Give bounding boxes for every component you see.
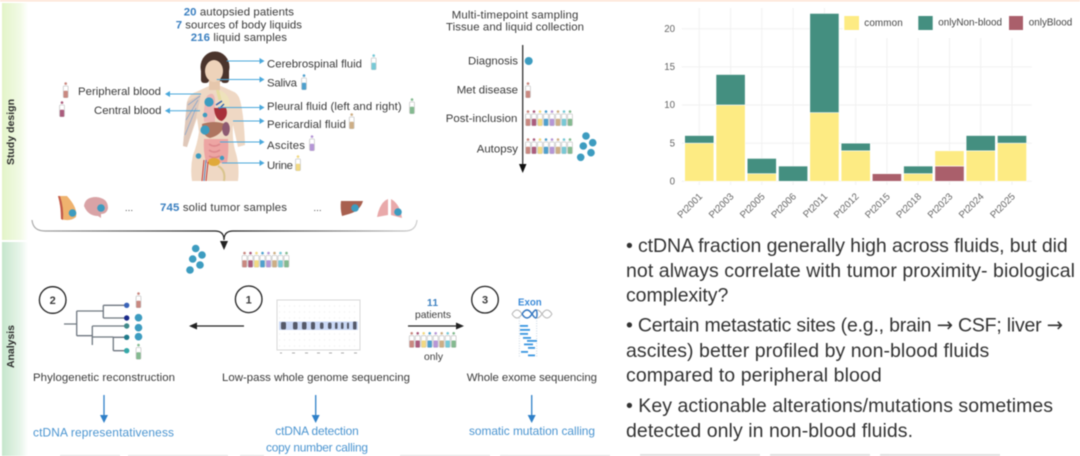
bullet: metastatic sites: [626, 314, 1063, 387]
bullet: actionable alterations: [626, 395, 1053, 442]
outcome label: ctDNA representativeness: [33, 426, 174, 440]
x axis labels: Pt2025: [988, 191, 1018, 221]
step number 2: 2: [50, 295, 56, 307]
bullet: ctDNA fraction: not always correlate with tumor proximity- biological: [626, 260, 1075, 282]
11 patients subset arrow: [408, 298, 464, 363]
bullet: actionable alterations: detected only in non-blood fluids.: [626, 420, 913, 442]
arrow: timeline axis: [519, 45, 526, 173]
outcome label: somatic mutation calling: [469, 424, 595, 438]
step label: Low-pass whole genome sequencing: [222, 372, 410, 384]
step 3: whole exome sequencing: [467, 286, 597, 438]
x axis labels: Pt2023: [926, 191, 955, 221]
timeline title: [446, 9, 584, 34]
phylogenetic tree: [64, 292, 142, 359]
icon: autopsy tubes: [526, 138, 572, 154]
step number 3: 3: [482, 295, 488, 307]
bullet: ctDNA fraction: [626, 235, 1075, 306]
timepoint labels: Diagnosis: [468, 55, 518, 67]
x axis labels: Pt2003: [707, 191, 736, 221]
panel: study design sidebar: [2, 3, 28, 240]
icon: brain: [84, 197, 108, 218]
legend: [844, 16, 1072, 30]
panel: analysis sidebar: [2, 242, 28, 456]
cohort summary text: 7 sources of body liquids: [176, 19, 302, 31]
y axis labels: 10: [664, 100, 676, 111]
fluid source labels: Ascites: [267, 140, 305, 152]
icon: lungs: [377, 199, 402, 218]
x axis labels: Pt2015: [863, 191, 893, 221]
clipped text remnants at bottom edge: [60, 454, 1000, 456]
step number 2: [39, 287, 66, 313]
arrow: step 1 to step 2: [189, 322, 244, 330]
11 patients subset arrow: patients: [415, 310, 451, 321]
fluid source labels: Central blood: [94, 105, 162, 117]
bullet: ctDNA fraction: • ctDNA fraction generally high across fluids, but did: [626, 235, 1068, 257]
icon: diagnosis tumor cell: [525, 57, 533, 65]
label: analysis: Analysis: [5, 325, 17, 368]
x axis labels: Pt2011: [801, 191, 830, 220]
timeline title: Multi-timepoint sampling: [452, 9, 578, 21]
top edge band: [0, 0, 1080, 2]
bullet: metastatic sites: ascites) better profiled by non-blood fluids: [626, 340, 990, 362]
arrow: to mutation calling: [528, 395, 536, 423]
y axis labels: 20: [664, 24, 676, 35]
step 1: low-pass whole genome sequencing: [222, 286, 410, 455]
step label: Phylogenetic reconstruction: [33, 372, 175, 384]
icon: met disease tube: [526, 82, 530, 98]
label: study design: Study design: [5, 99, 17, 165]
step 2: phylogenetic reconstruction: [33, 287, 175, 440]
fluid source labels: Urine: [267, 160, 293, 172]
x axis labels: Pt2005: [738, 191, 768, 221]
bullet: ctDNA fraction: complexity?: [626, 284, 728, 306]
fluid source labels: Pleural fluid (left and right): [267, 101, 402, 113]
timepoint labels: Post-inclusion: [446, 113, 517, 125]
timepoint labels: Autopsy: [477, 143, 518, 155]
legend: onlyNon-blood: [938, 18, 1002, 28]
fluid arrows: [166, 61, 264, 163]
x axis labels: Pt2012: [832, 191, 862, 221]
step number 1: 1: [246, 294, 252, 306]
solid tumor sample row: ...: [125, 203, 133, 213]
step number 3: [472, 286, 498, 313]
solid tumor sample row: ...: [314, 203, 322, 213]
outcome label: [266, 424, 368, 455]
bullet: metastatic sites: • Certain metastatic sites (e.g., brain → CSF; liver →: [626, 314, 1063, 337]
icons: sample tubes for each fluid: [60, 54, 414, 171]
cohort summary text: 216 liquid samples: [191, 32, 287, 44]
bracket merging samples: [32, 220, 417, 250]
fluid source labels: Peripheral blood: [78, 86, 161, 98]
11 patients subset arrow: 11: [427, 298, 438, 309]
icon: human body with organs: [183, 52, 245, 181]
icon: merged tube rack: [242, 252, 289, 267]
bars: [685, 13, 1027, 181]
bullet: metastatic sites: compared to peripheral blood: [626, 365, 882, 387]
timepoint labels: [446, 55, 518, 155]
fluid source labels: Pericardial fluid: [267, 119, 346, 131]
bullet: actionable alterations: • Key actionable alterations/mutations sometimes: [626, 395, 1053, 417]
x axis labels: Pt2024: [957, 191, 987, 221]
exon diagram: [512, 298, 552, 357]
fluid source labels: Saliva: [267, 78, 298, 90]
copy number plot: [277, 300, 360, 353]
timepoint labels: Met disease: [457, 84, 518, 96]
y axis labels: 5: [670, 138, 675, 149]
icon: liver: [341, 201, 363, 216]
exon diagram: Exon: [518, 298, 542, 309]
icon: breast: [58, 196, 76, 220]
step label: Whole exome sequencing: [467, 372, 597, 384]
timeline panel: [446, 9, 596, 173]
x axis labels: Pt2006: [769, 191, 799, 221]
legend: onlyBlood: [1029, 18, 1072, 28]
outcome label: copy number calling: [266, 441, 368, 455]
solid tumor sample row: 745 solid tumor samples: [160, 202, 287, 214]
arrow: to detection: [312, 395, 320, 423]
fluid source labels: Cerebrospinal fluid: [267, 59, 362, 71]
arrow: to representativeness: [100, 395, 108, 423]
y axis labels: 15: [664, 62, 675, 73]
x axis labels: Pt2001: [676, 191, 705, 221]
x axis labels: Pt2018: [895, 191, 924, 221]
legend: common: [864, 18, 903, 29]
fluid source labels: [78, 59, 402, 172]
icon: autopsy tumor cells: [577, 132, 596, 161]
timeline title: Tissue and liquid collection: [446, 22, 584, 34]
x axis labels: [676, 191, 1018, 221]
step number 1: [235, 286, 262, 313]
cohort summary text: [176, 7, 302, 44]
solid tumor sample row: [58, 196, 402, 220]
outcome label: ctDNA detection: [275, 424, 359, 438]
y axis labels: [664, 24, 676, 188]
takeaway text block: [626, 235, 1075, 442]
icon: merged tumor cells: [186, 245, 206, 274]
stacked bar chart: [664, 8, 1072, 221]
y axis labels: 0: [670, 176, 676, 188]
11 patients subset arrow: only: [424, 352, 444, 363]
cohort summary text: 20 autopsied patients: [184, 7, 294, 19]
icon: post-inclusion tubes: [526, 110, 572, 126]
